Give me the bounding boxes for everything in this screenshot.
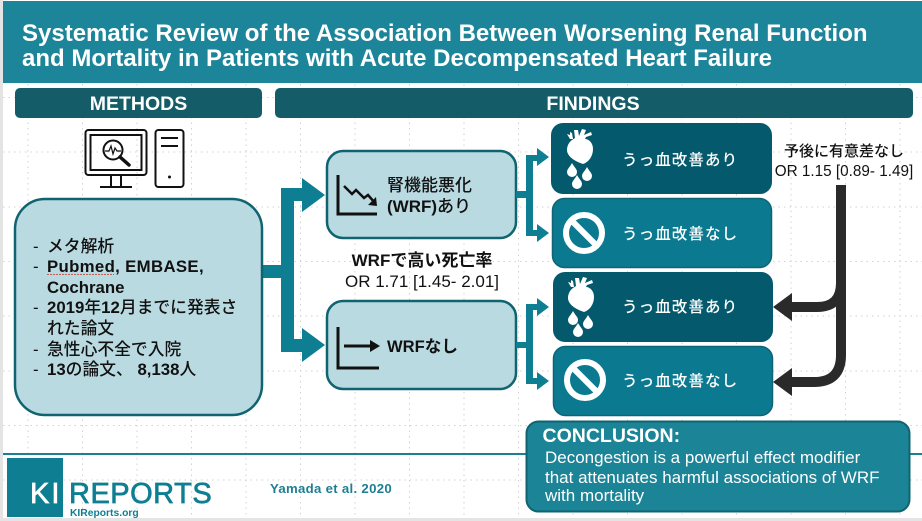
text: no prognostic difference: OR 1.15 [0.89- 1.49] — [775, 163, 913, 180]
logo: KI Reports: KIReports.org — [70, 508, 139, 519]
panel: conclusion: CONCLUSION: — [542, 425, 680, 447]
title banner — [3, 1, 922, 83]
panel: methods details: メタ解析 — [47, 237, 114, 256]
logo: KI Reports: REPORTS — [69, 478, 212, 510]
panel: WRF present: (WRF)あり — [387, 197, 471, 216]
arrows: decongestion outcomes compared — [773, 185, 841, 396]
heading: methods: METHODS — [90, 93, 187, 115]
branch arrows: WRF present — [516, 148, 549, 242]
outcome: no decongestion improvement, no WRF — [554, 346, 772, 416]
panel: methods details: - — [33, 257, 39, 276]
text: no prognostic difference: 予後に有意差なし — [784, 143, 904, 160]
flow arrows from methods to WRF groups — [262, 178, 325, 362]
heading: findings: FINDINGS — [546, 93, 640, 115]
panel: methods details: - — [33, 237, 39, 256]
outcome: no decongestion improvement, WRF — [552, 198, 772, 268]
panel: conclusion: Decongestion is a powerful effect modifier — [545, 448, 861, 467]
panel: methods details: - — [33, 298, 39, 317]
text: WRF mortality result: OR 1.71 [1.45- 2.01] — [345, 272, 499, 291]
panel: WRF present — [327, 151, 516, 238]
outcome: no decongestion improvement, no WRF: うっ血改善なし — [622, 372, 738, 390]
panel: conclusion — [526, 422, 910, 512]
panel: conclusion: that attenuates harmful associations of WRF — [545, 468, 880, 487]
outcome: decongestion improved, WRF — [551, 123, 772, 194]
footer rule — [3, 453, 922, 455]
panel: methods details: 13 — [47, 360, 66, 379]
panel: methods details: Cochrane — [47, 278, 124, 297]
panel: methods details: の論文、 8,138人 — [66, 360, 196, 379]
panel: methods details: 年12月までに発表さ — [84, 298, 237, 317]
logo: KI Reports — [7, 458, 212, 519]
panel: methods details: 2019 — [47, 298, 84, 317]
branch arrows: no WRF — [516, 298, 549, 390]
panel: conclusion: with mortality — [544, 486, 645, 505]
panel: methods details: 急性心不全で入院 — [47, 340, 181, 359]
text: WRF mortality result: WRFで高い死亡率 — [352, 250, 492, 270]
text: no prognostic difference — [775, 143, 913, 180]
panel: methods details: Pubmed, EMBASE, — [47, 257, 204, 276]
outcome: decongestion improved, WRF: うっ血改善あり — [622, 151, 738, 169]
panel: no WRF: WRFなし — [387, 337, 458, 356]
title banner: Systematic Review of the Association Between Worsening Renal Function — [22, 20, 868, 47]
panel: WRF present: 腎機能悪化 — [387, 176, 472, 195]
panel: methods details — [15, 199, 262, 415]
outcome: decongestion improved, no WRF — [553, 272, 773, 342]
outcome: decongestion improved, no WRF: うっ血改善あり — [622, 298, 738, 316]
logo: KI Reports: KI — [30, 478, 61, 510]
citation: Yamada et al. 2020 — [270, 481, 392, 496]
panel: methods details: - — [33, 340, 39, 359]
outcome: no decongestion improvement, WRF: うっ血改善なし — [622, 225, 738, 243]
panel: methods details: れた論文 — [47, 319, 114, 338]
panel: no WRF — [327, 301, 516, 389]
heading: methods — [15, 88, 262, 118]
panel: methods details: - — [33, 360, 39, 379]
text: WRF mortality result — [345, 250, 499, 291]
title banner: and Mortality in Patients with Acute Decompensated Heart Failure — [22, 45, 772, 72]
heading: findings — [275, 88, 913, 118]
icon: computer with magnifier — [86, 130, 184, 187]
